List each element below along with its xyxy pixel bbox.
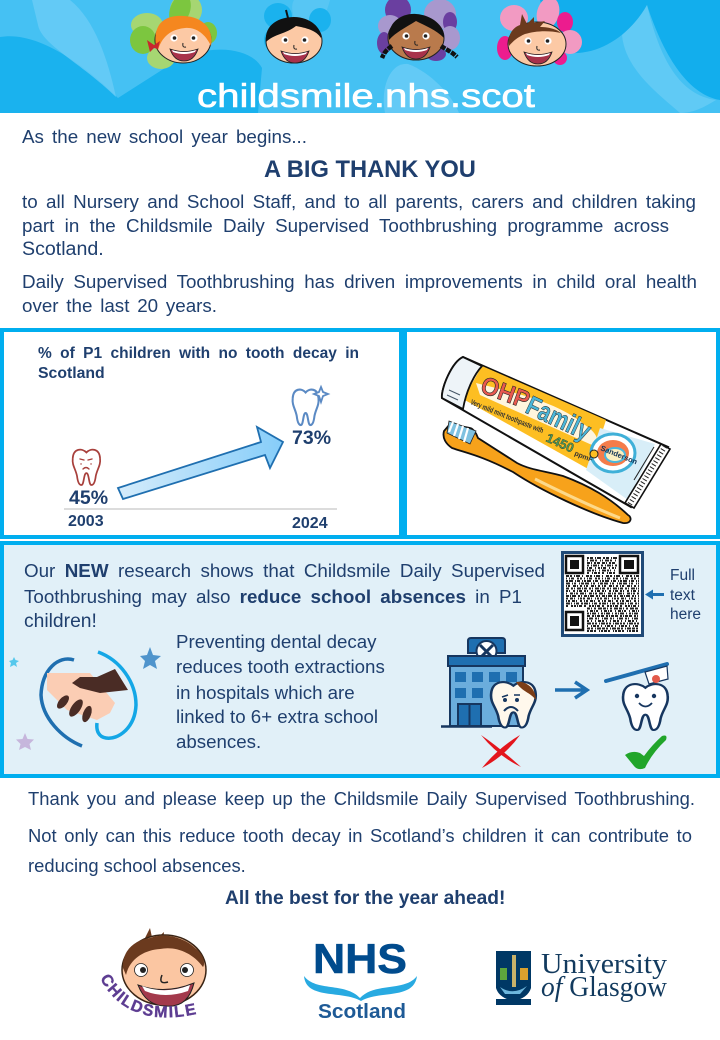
text: improvements paragraph: Daily Supervised Toothbrushing has driven improvements in child oral health [22, 271, 697, 292]
text: improvements paragraph: over the last 20 years. [22, 295, 217, 316]
text: preventing decay [176, 631, 385, 752]
text: new research: children! [24, 611, 97, 632]
panel: toothpaste border [403, 328, 720, 539]
text: preventing decay: in hospitals which are [176, 682, 355, 703]
illustration: toothpaste and toothbrush [442, 357, 670, 523]
text: full text here: Full [670, 567, 695, 584]
logo: NHS Scotland: Scotland [318, 1001, 406, 1023]
value: 73%: 73% [292, 427, 331, 449]
text: new research: Toothbrushing may also reduce school absences in P1 [24, 586, 522, 607]
logo: University of Glasgow: of Glasgow [541, 971, 667, 1003]
illustration: toothpaste and toothbrush: 1450 [544, 430, 576, 456]
arrow: rising trend [118, 427, 283, 499]
text: improvements paragraph [22, 271, 697, 316]
arrow: hospital to healthy tooth [555, 682, 587, 698]
icon: happy tooth with brush [606, 664, 668, 730]
label: 2024: 2024 [292, 515, 328, 532]
toothbrush [443, 421, 631, 523]
illustration: toothpaste and toothbrush: Sanderson [599, 444, 639, 467]
text: thanks paragraph [22, 191, 696, 260]
text: intro line: As the new school year begins... [22, 126, 307, 147]
text: preventing decay: absences. [176, 731, 261, 752]
child face 3 [377, 0, 460, 61]
icon: hospital and decayed tooth [441, 638, 536, 728]
text: reducing absences [28, 825, 692, 876]
child face 4 [497, 0, 582, 66]
text: full text here: text [670, 586, 695, 604]
illustration: toothpaste and toothbrush: OHP [477, 371, 534, 415]
icon: handshake [41, 652, 136, 746]
tube [442, 357, 668, 507]
logo: University of Glasgow: University [541, 948, 668, 980]
text: thanks paragraph: Scotland. [22, 238, 104, 260]
icon: red cross [481, 735, 521, 768]
child face 2 [264, 3, 331, 63]
text: preventing decay: Preventing dental decay [176, 631, 377, 652]
logo: NHS Scotland: NHS [313, 935, 407, 982]
tube crimp [625, 444, 670, 508]
text: full text here: here [670, 606, 701, 623]
heading: a big thank you: A BIG THANK YOU [264, 157, 476, 183]
text: new research [24, 560, 545, 632]
icon: sad tooth [73, 450, 100, 485]
child face 1 [130, 0, 217, 69]
icon: purple star [16, 733, 34, 750]
value: 45%: 45% [69, 487, 108, 509]
icon: healthy tooth [293, 387, 328, 425]
arrow: to QR code [645, 590, 664, 600]
icon: green tick [625, 736, 666, 769]
logo: Childsmile: CHILDSMILE [102, 974, 196, 1018]
text: new research: Our NEW research shows that Childsmile Daily Supervised [24, 560, 545, 581]
chart: no tooth decay [64, 387, 337, 509]
illustration: toothpaste and toothbrush: ppmF [573, 450, 594, 464]
text: all the best: All the best for the year ahead! [225, 888, 505, 909]
chart title: % of P1 children with no tooth decay in [38, 345, 359, 362]
text: thank you: Thank you and please keep up the Childsmile Daily Supervised Toothbrushing. [28, 788, 695, 809]
tube cap [442, 357, 482, 409]
logo: University of Glasgow [496, 948, 668, 1005]
text: preventing decay: linked to 6+ extra school [176, 706, 378, 727]
panel: research [0, 541, 720, 778]
text: thanks paragraph: part in the Childsmile Daily Supervised Toothbrushing programme across [22, 215, 669, 236]
header banner [0, 0, 720, 114]
logo: Childsmile [102, 928, 207, 1018]
text: thanks paragraph: to all Nursery and School Staff, and to all parents, carers and children taking [22, 191, 696, 212]
text: reducing absences: reducing school absences. [28, 855, 246, 876]
panel: chart border [0, 328, 403, 539]
icon: cyan star [9, 657, 19, 667]
illustration: toothpaste and toothbrush: Very mild mint toothpaste with [469, 398, 545, 435]
website address: childsmile.nhs.scot [197, 77, 535, 114]
illustration: toothpaste and toothbrush: Family [521, 390, 596, 446]
text: reducing absences: Not only can this reduce tooth decay in Scotland’s children it can contribute to [28, 825, 692, 846]
text: preventing decay: reduces tooth extractions [176, 656, 385, 677]
icon: blue star [140, 647, 161, 669]
QR code [562, 552, 642, 636]
logo: NHS Scotland [304, 935, 417, 1023]
chart title: Scotland [38, 365, 105, 382]
chart title [38, 345, 359, 382]
label: 2003: 2003 [68, 513, 104, 530]
text: full text here [670, 567, 701, 623]
